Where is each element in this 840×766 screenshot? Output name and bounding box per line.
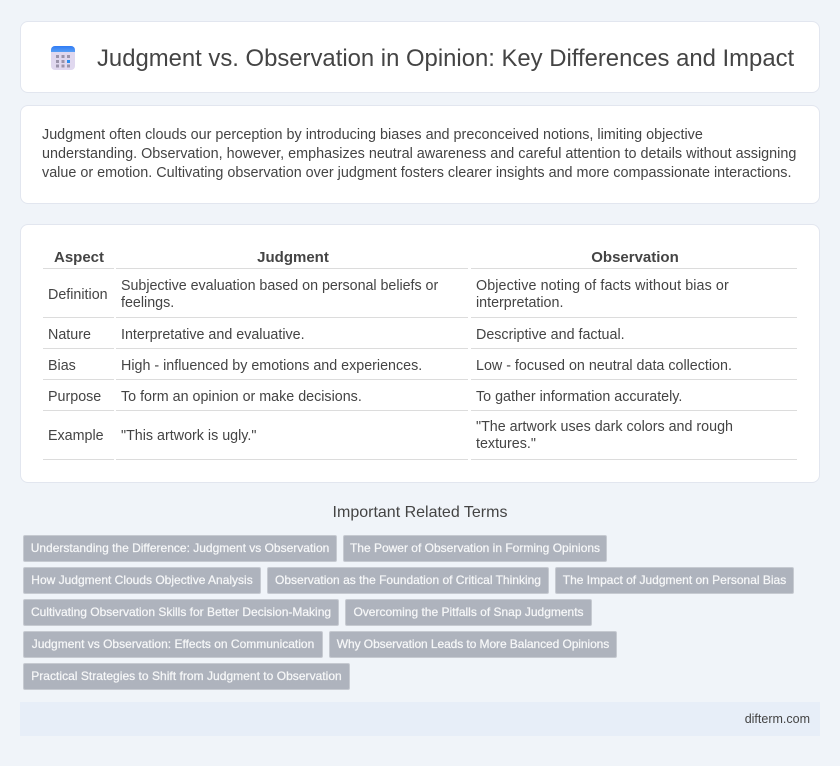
header panel [20,21,820,93]
footer bar [20,702,820,736]
row: purpose [48,389,682,405]
table header row: Judgment [257,249,329,266]
footer source: difterm.com [745,712,810,726]
row: bias [48,358,732,374]
row: bias: Low - focused on neutral data collection. [476,358,732,374]
row: definition: feelings. [121,295,174,311]
row: definition: Subjective evaluation based on personal beliefs or [121,278,438,294]
row: example [48,419,733,452]
row: definition: Objective noting of facts without bias or [476,278,729,294]
related terms heading: Important Related Terms [333,504,507,521]
related terms tags: Overcoming the Pitfalls of Snap Judgments [353,605,584,619]
comparison table panel [20,224,820,483]
row: purpose: To gather information accurately. [476,389,682,405]
icon: calendar [51,46,75,70]
row: definition: Definition [48,287,108,303]
related terms tags: Practical Strategies to Shift from Judgment to Observation [31,669,342,683]
row: example: textures." [476,436,536,452]
related terms tags: Cultivating Observation Skills for Better Decision-Making [31,605,331,619]
row: example: "The artwork uses dark colors and rough [476,419,733,435]
related terms tags: Observation as the Foundation of Critical Thinking [275,573,541,587]
row: definition: interpretation. [476,295,563,311]
intro panel [20,105,820,204]
row: nature: Interpretative and evaluative. [121,327,305,343]
related terms tags: Judgment vs Observation: Effects on Communication [32,637,314,651]
row: bias: Bias [48,358,76,374]
intro text [42,127,796,181]
related terms tags: The Power of Observation in Forming Opinions [350,541,600,555]
table header row [54,249,679,266]
title: Judgment vs. Observation in Opinion: Key Differences and Impact [97,45,794,72]
row: example: "This artwork is ugly." [121,428,256,444]
row: example: Example [48,428,104,444]
intro text: Judgment often clouds our perception by introducing biases and preconceived notions, limiting objective [42,127,703,143]
row: bias: High - influenced by emotions and experiences. [121,358,422,374]
intro text: understanding. Observation, however, emphasizes neutral awareness and careful attention to details without assigning [42,146,796,162]
row: nature: Descriptive and factual. [476,327,625,343]
row: purpose: To form an opinion or make decisions. [121,389,362,405]
table header row: Aspect [54,249,104,266]
related terms tags: The Impact of Judgment on Personal Bias [563,573,786,587]
related terms tags: Why Observation Leads to More Balanced Opinions [337,637,609,651]
intro text: value or emotion. Cultivating observation over judgment fosters clearer insights and more compassionate interactions. [42,165,791,181]
related terms tags: How Judgment Clouds Objective Analysis [31,573,253,587]
row: definition [48,278,729,311]
row: purpose: Purpose [48,389,101,405]
related terms tags: Understanding the Difference: Judgment vs Observation [31,541,329,555]
table header row: Observation [591,249,679,266]
related terms tags [23,535,794,690]
row: nature [48,327,625,343]
row: nature: Nature [48,327,91,343]
